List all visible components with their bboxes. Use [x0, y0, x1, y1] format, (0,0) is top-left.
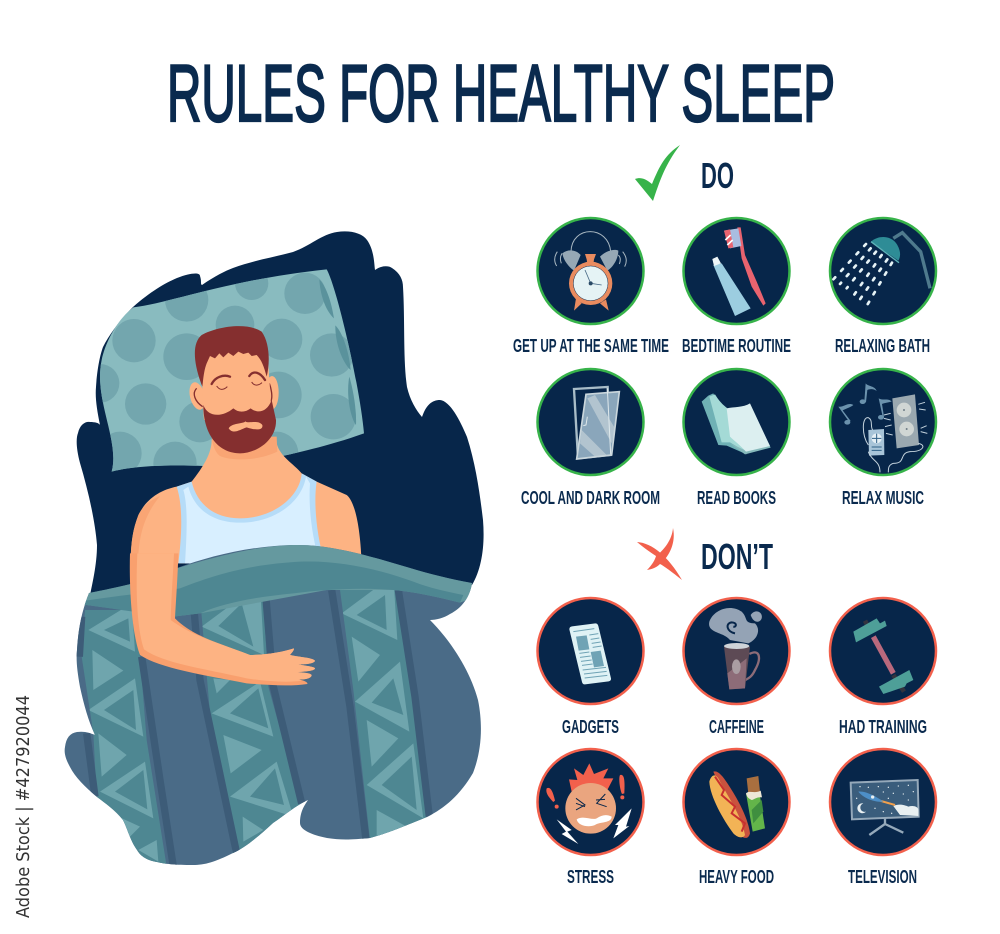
man: torso, vest and head	[131, 326, 362, 563]
section heading: DO: DO	[701, 155, 734, 196]
label: relaxing bath: RELAXING BATH	[835, 336, 930, 356]
icon: alarm clock	[538, 218, 644, 324]
icon: green check	[635, 145, 680, 201]
icon: smartphone	[538, 598, 644, 704]
icon: shower	[830, 218, 936, 324]
blanket fold	[60, 545, 480, 617]
label: stress: STRESS	[567, 867, 614, 887]
panel: do icons	[538, 218, 936, 475]
dark stripe lines	[79, 590, 429, 867]
label: television: TELEVISION	[848, 867, 917, 887]
icon: dumbbell	[830, 598, 936, 704]
label: read books: READ BOOKS	[697, 488, 776, 508]
label: gadgets: GADGETS	[562, 717, 619, 737]
icon: toothbrush and paste	[684, 218, 790, 324]
label: cool and dark room: COOL AND DARK ROOM	[521, 488, 660, 508]
section heading: DON'T	[637, 528, 773, 580]
teal blanket stripes	[82, 590, 427, 867]
man: arm over blanket	[130, 553, 315, 685]
panel: don't icons	[538, 598, 936, 855]
icon: hot dog and snack bar	[684, 749, 790, 855]
label: bedtime routine: BEDTIME ROUTINE	[682, 336, 791, 356]
section heading: DO	[635, 145, 734, 201]
icon: coffee cup	[684, 598, 790, 704]
icon: stressed face	[538, 749, 644, 855]
dark night background shape	[77, 231, 484, 640]
label: had training: HAD TRAINING	[839, 717, 927, 737]
icon: window	[538, 369, 644, 475]
label: relax music: RELAX MUSIC	[842, 488, 924, 508]
pillow	[100, 269, 364, 472]
illustration: sleeping man	[60, 231, 493, 873]
label: heavy food: HEAVY FOOD	[699, 867, 774, 887]
icon: music and speaker	[830, 369, 936, 475]
icon: open book	[684, 369, 790, 475]
blanket	[60, 540, 493, 873]
label: caffeine: CAFFEINE	[709, 717, 764, 737]
icon: red cross	[637, 528, 682, 580]
label: get up at the same time: GET UP AT THE SAME TIME	[513, 336, 669, 356]
section heading: DON'T: DON’T	[701, 536, 773, 577]
icon: television	[830, 749, 936, 855]
stock id text: Adobe Stock | #427920044	[13, 695, 34, 918]
